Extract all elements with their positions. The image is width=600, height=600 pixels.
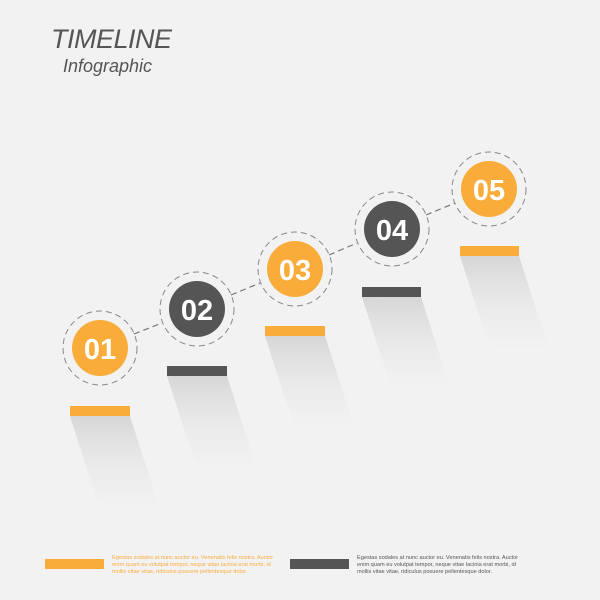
subtitle: Infographic bbox=[63, 56, 152, 76]
step 04: 04 bbox=[376, 215, 408, 247]
step 01: 01 bbox=[84, 334, 116, 366]
bars bbox=[70, 246, 519, 416]
connector dashes bbox=[134, 203, 455, 334]
step 03 bbox=[258, 232, 332, 306]
step 02 bbox=[160, 272, 234, 346]
legend grey swatch bbox=[290, 559, 349, 569]
step 02: 02 bbox=[181, 295, 213, 327]
legend orange swatch bbox=[45, 559, 104, 569]
legend grey text: Egestas sodales at nunc auctor eu. Venenatis felis nostra. Auctor enim quam eu volutpat tempor, neque vitae lacinia erat morbi, id mollis vitae vitae, ridiculus posuere pellentesque dolor. bbox=[357, 555, 518, 575]
step 03: 03 bbox=[279, 255, 311, 287]
step 05: 05 bbox=[473, 175, 505, 207]
step 05 bbox=[452, 152, 526, 226]
shadows bbox=[70, 256, 554, 525]
legend orange text: Egestas sodales at nunc auctor eu. Venenatis felis nostra. Auctor enim quam eu volutpat tempor, neque vitae lacinia erat morbi, id mollis vitae vitae, ridiculus posuere pellentesque dolor. bbox=[112, 555, 273, 575]
step 01 bbox=[63, 311, 137, 385]
title: TIMELINE bbox=[51, 24, 172, 54]
step 04 bbox=[355, 192, 429, 266]
